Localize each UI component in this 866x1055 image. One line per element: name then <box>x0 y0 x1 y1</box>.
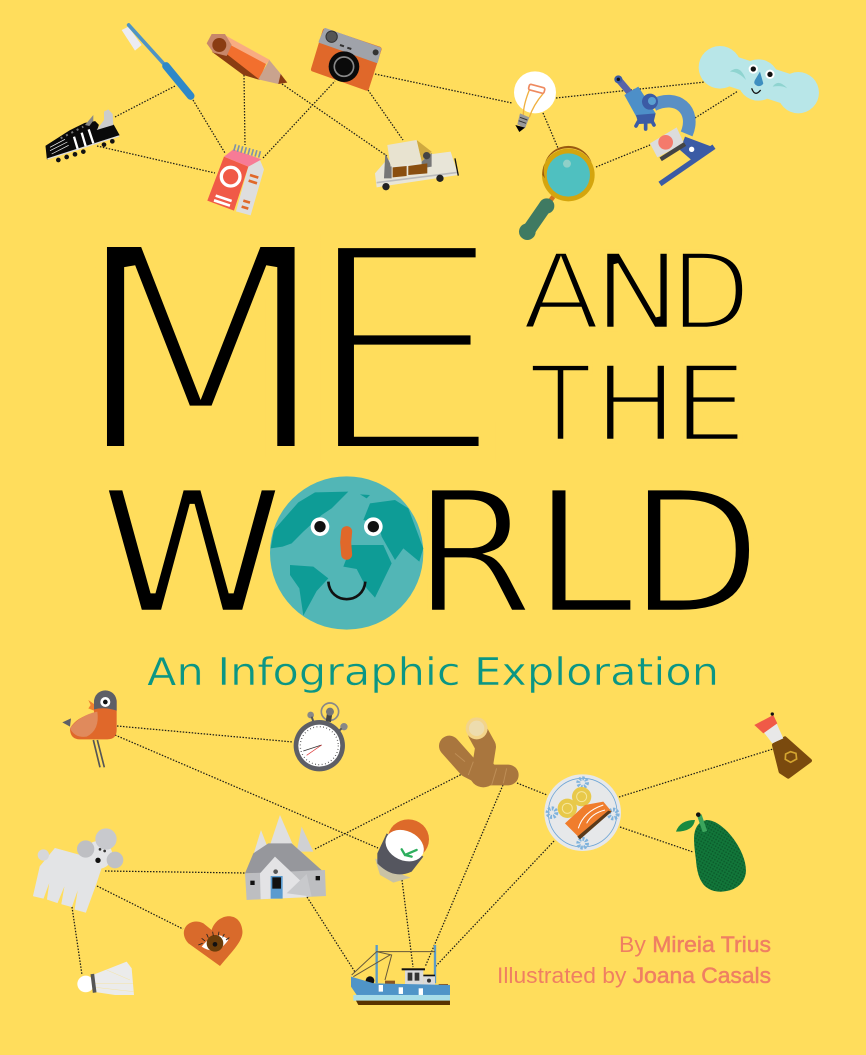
icon: sushi roll <box>375 819 429 883</box>
icon: magnifying glass <box>519 146 595 240</box>
byline <box>497 932 771 988</box>
top right icons <box>514 46 819 240</box>
title: ME AND THE WORLD: A <box>522 232 600 355</box>
title: ME AND THE WORLD: R <box>412 454 534 652</box>
byline: Illustrated by Joana Casals <box>497 963 771 988</box>
icon: shuttlecock <box>77 962 134 995</box>
globe with face <box>270 476 423 630</box>
title: ME AND THE WORLD: T <box>530 343 591 466</box>
title: ME AND THE WORLD: M <box>72 185 329 520</box>
icon: stopwatch <box>294 703 348 771</box>
title: ME AND THE WORLD: W <box>99 455 285 653</box>
icon: plate with salmon <box>544 774 621 851</box>
top icons <box>46 25 458 215</box>
icon: sneaker <box>46 109 119 162</box>
byline: By Mireia Trius <box>619 932 771 957</box>
icon: house with cones <box>245 815 326 900</box>
icon: avocado <box>676 812 746 892</box>
icon: car with box <box>375 140 458 190</box>
dotted network: bottom <box>72 726 773 975</box>
icon: toothbrush <box>122 25 191 96</box>
subtitle: An Infographic Exploration <box>147 650 719 695</box>
title: ME AND THE WORLD: H <box>594 343 677 467</box>
icon: poodle <box>33 828 123 912</box>
title: ME AND THE WORLD: L <box>532 454 634 652</box>
icon: camera <box>313 29 380 88</box>
title: ME AND THE WORLD: E <box>296 183 509 523</box>
icon: heart with eye <box>184 916 242 966</box>
icon: ginger <box>449 717 508 787</box>
icon: light bulb <box>514 71 556 132</box>
title: ME AND THE WORLD: N <box>593 232 681 355</box>
icon: milk carton <box>207 147 264 215</box>
icon: soy sauce bottle <box>754 712 810 777</box>
title: ME AND THE WORLD: D <box>629 455 762 653</box>
title: ME AND THE WORLD <box>72 183 762 653</box>
dotted network: top <box>97 74 738 173</box>
icon: cloud with face <box>699 46 819 113</box>
icon: microscope <box>614 75 714 184</box>
bottom right icons <box>351 712 810 1005</box>
icon: pencil <box>207 34 287 84</box>
icon: bird <box>62 690 117 767</box>
icon: fishing boat <box>351 945 450 1005</box>
title: ME AND THE WORLD: E <box>672 343 747 467</box>
title: ME AND THE WORLD: D <box>670 231 750 354</box>
bottom left icons <box>33 690 348 995</box>
